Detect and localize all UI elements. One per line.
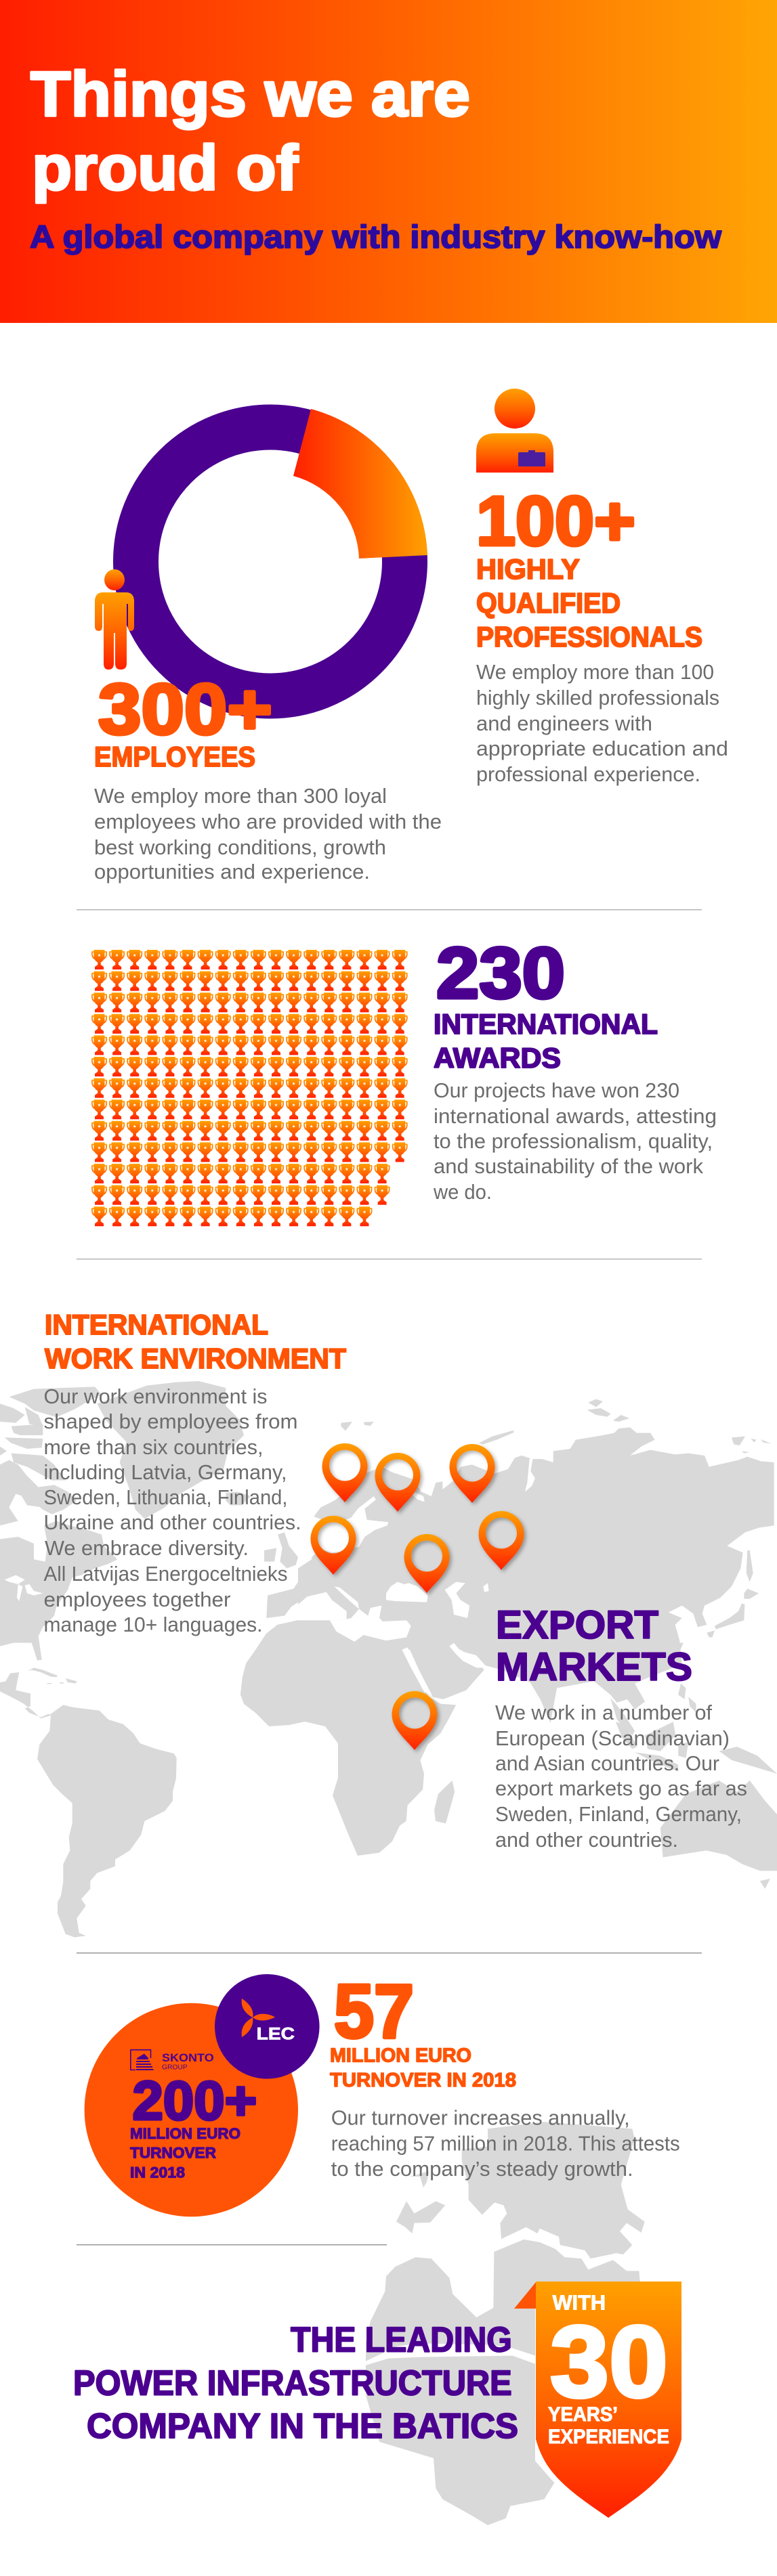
text: awards description: we do. <box>433 1180 492 1204</box>
stat: 57 million euro turnover: 57 <box>334 1969 414 2054</box>
text: export markets description: export markets go as far as <box>495 1776 747 1800</box>
text: work environment description: All Latvijas Energoceltnieks <box>43 1562 287 1586</box>
stat: 100+ professionals: 100+ <box>476 482 635 560</box>
stat: 100+ professionals: PROFESSIONALS <box>476 621 702 653</box>
stat: 100+ professionals: QUALIFIED <box>476 587 621 619</box>
text: export markets description: Sweden, Finland, Germany, <box>495 1802 742 1826</box>
text: export markets description: and other countries. <box>495 1828 678 1852</box>
map: North and East Asia <box>522 1399 774 1665</box>
text: awards description: international awards, attesting <box>434 1104 717 1128</box>
stat: 230 international awards: 230 <box>436 932 565 1013</box>
badge: 30 years experience <box>514 2282 681 2518</box>
text: awards description: and sustainability of the work <box>434 1154 703 1178</box>
heading: international work environment: INTERNATIONAL <box>45 1309 268 1340</box>
map: Estonian island <box>396 2201 445 2233</box>
heading: export markets <box>496 1603 692 1689</box>
stat: 57 million euro turnover: MILLION EURO <box>330 2045 471 2067</box>
text: employees description: best working conditions, growth <box>94 835 386 859</box>
subtitle: A global company with industry know-how <box>30 219 721 255</box>
text: turnover description: to the company’s steady growth. <box>331 2157 633 2181</box>
text: export markets description: and Asian countries. Our <box>495 1751 719 1775</box>
world map <box>0 1381 777 1938</box>
label: million euro turnover in 2018: MILLION EURO <box>130 2125 240 2142</box>
map: Europe and Middle East <box>298 1422 535 1693</box>
stat: 230 international awards: INTERNATIONAL <box>434 1008 658 1040</box>
label: million euro turnover in 2018: IN 2018 <box>130 2164 185 2181</box>
pin 2 <box>375 1453 420 1512</box>
text: work environment description: We embrace diversity. <box>45 1536 249 1560</box>
text: work environment description: manage 10+ languages. <box>43 1613 263 1636</box>
label: million euro turnover in 2018: TURNOVER <box>130 2145 216 2162</box>
map: Central and South America <box>0 1667 177 1938</box>
text: awards description <box>433 1078 717 1204</box>
badge: 30 years experience: 30 <box>550 2305 668 2418</box>
text: professionals description: highly skilled professionals <box>476 686 719 710</box>
title: proud of <box>32 132 299 203</box>
map: Baltic states <box>366 2122 645 2525</box>
heading: international work environment <box>45 1309 346 1374</box>
circle: LEC logo <box>215 1974 320 2079</box>
text: turnover description: reaching 57 million in 2018. This attests <box>331 2131 680 2156</box>
pin 7 <box>392 1691 438 1750</box>
circle: Skonto Group turnover <box>85 2003 298 2217</box>
pin 4 <box>310 1516 356 1575</box>
text: professionals description: and engineers with <box>476 712 652 735</box>
text: work environment description: employees together <box>43 1588 230 1611</box>
closing statement: POWER INFRASTRUCTURE <box>73 2364 512 2403</box>
pin 6 <box>478 1511 524 1570</box>
map: Latvia <box>366 2240 640 2361</box>
badge: 30 years experience: EXPERIENCE <box>548 2426 669 2448</box>
stat: 300+ employees: EMPLOYEES <box>94 741 255 772</box>
text: work environment description: more than six countries, <box>43 1435 263 1459</box>
text: professionals description: appropriate education and <box>476 737 728 760</box>
stat: 100+ professionals <box>476 482 702 653</box>
logo: Skonto Group <box>131 2050 214 2072</box>
map: Lithuania <box>366 2356 554 2525</box>
text: professionals description: professional experience. <box>476 762 700 786</box>
text: work environment description: Sweden, Lithuania, Finland, <box>43 1485 287 1509</box>
pin 5 <box>404 1534 450 1593</box>
logo: Skonto Group: SKONTO <box>162 2051 214 2064</box>
heading: export markets: EXPORT <box>496 1603 658 1647</box>
header banner <box>0 0 777 323</box>
text: professionals description: We employ more than 100 <box>476 660 714 684</box>
stat: 100+ professionals: HIGHLY <box>476 553 580 585</box>
text: employees description: We employ more than 300 loyal <box>94 784 387 808</box>
heading: export markets: MARKETS <box>496 1645 692 1689</box>
text: export markets description: European (Scandinavian) <box>495 1726 730 1750</box>
circle: LEC logo: LEC <box>257 2025 295 2044</box>
trophy grid: 230 awards <box>92 950 407 1226</box>
badge: 30 years experience: WITH <box>553 2291 606 2314</box>
text: work environment description: shaped by employees from <box>43 1410 298 1433</box>
logo: Skonto Group: GROUP <box>162 2064 188 2072</box>
map: small island <box>410 2171 429 2187</box>
title: Things we are <box>30 58 470 129</box>
text: work environment description: including Latvia, Germany, <box>43 1460 287 1484</box>
text: employees description: opportunities and experience. <box>94 860 370 883</box>
heading: international work environment: WORK ENVIRONMENT <box>45 1342 346 1374</box>
map pins <box>310 1443 524 1750</box>
pin 3 <box>450 1444 495 1503</box>
map: Greenland and North America <box>0 1381 307 1661</box>
icon: standing person <box>95 569 134 670</box>
icon: professional with briefcase <box>476 389 553 473</box>
text: turnover description: Our turnover increases annually, <box>331 2105 630 2130</box>
label: million euro turnover in 2018 <box>130 2125 240 2181</box>
stat: 230 international awards <box>434 932 658 1074</box>
text: work environment description: Our work environment is <box>43 1384 267 1408</box>
text: awards description: Our projects have won 230 <box>434 1078 679 1102</box>
text: export markets description <box>495 1701 747 1852</box>
closing statement: THE LEADING <box>291 2321 512 2360</box>
donut chart: employees <box>135 409 427 696</box>
stat: 200+: 200+ <box>133 2071 257 2132</box>
stat: 57 million euro turnover <box>330 1969 516 2091</box>
stat: 57 million euro turnover: TURNOVER IN 2018 <box>330 2070 516 2091</box>
text: professionals description <box>476 660 728 786</box>
stat: 230 international awards: AWARDS <box>434 1042 561 1074</box>
text: turnover description <box>331 2105 680 2181</box>
title <box>30 58 470 203</box>
text: export markets description: We work in a number of <box>495 1701 712 1724</box>
text: work environment description: Ukraine and other countries. <box>43 1510 301 1534</box>
map: Estonia <box>462 2122 645 2258</box>
badge: 30 years experience: YEARS’ <box>548 2403 618 2426</box>
map: Africa, Arabia, South Asia and Oceania <box>240 1620 777 1889</box>
pin 1 <box>322 1443 367 1502</box>
closing statement: COMPANY IN THE BATICS <box>87 2407 518 2446</box>
closing statement <box>73 2321 518 2446</box>
text: work environment description <box>43 1384 301 1636</box>
text: employees description <box>94 784 442 883</box>
stat: 300+ employees: 300+ <box>98 670 272 749</box>
text: awards description: to the professionalism, quality, <box>434 1129 713 1153</box>
text: employees description: employees who are provided with the <box>94 810 442 833</box>
